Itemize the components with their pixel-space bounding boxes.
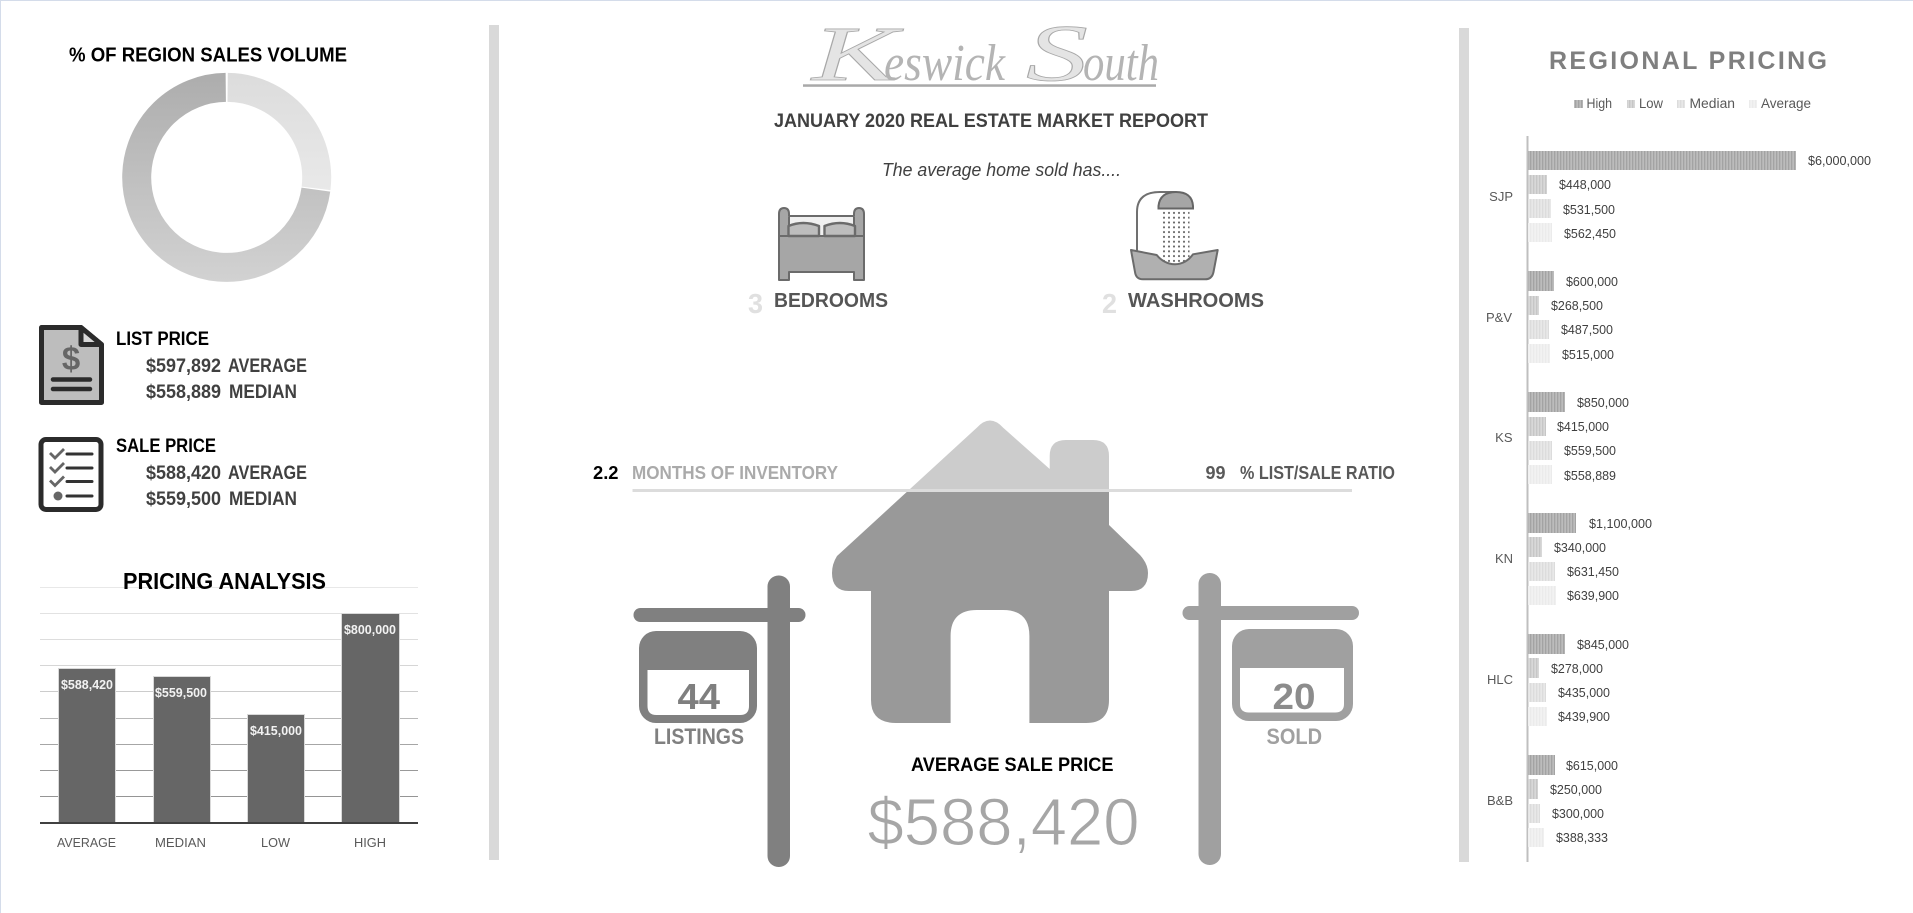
icon: house	[832, 420, 1148, 723]
group: P&V: $268,500	[1551, 299, 1603, 313]
group: SJP	[1489, 151, 1871, 242]
bar values: $588,420	[61, 678, 113, 692]
title: Keswick South: S	[1026, 10, 1088, 98]
group: KS: $559,500	[1564, 444, 1616, 458]
stat: bedrooms: 3	[748, 288, 763, 319]
bar values	[61, 623, 396, 738]
group: SJP: SJP	[1489, 189, 1513, 204]
sign: sold: 20	[1272, 676, 1316, 717]
group: P&V: P&V	[1486, 310, 1512, 325]
group: P&V: $600,000	[1566, 275, 1618, 289]
panel: left column	[40, 44, 418, 850]
bar chart: pricing analysis	[40, 568, 418, 850]
category labels	[57, 835, 386, 850]
legend: High	[1586, 96, 1612, 111]
legend: Median	[1690, 96, 1735, 111]
bars	[58, 614, 400, 822]
list price block	[116, 328, 307, 403]
list price block: AVERAGE	[228, 356, 307, 377]
stat line: inventory and ratio	[593, 463, 1395, 492]
heading: regional pricing: REGIONAL PRICING	[1549, 47, 1827, 75]
group: B&B: $300,000	[1552, 807, 1604, 821]
bar values: $415,000	[250, 724, 302, 738]
group: B&B	[1487, 755, 1618, 847]
sale price block: MEDIAN	[229, 489, 297, 510]
group: KN: KN	[1495, 551, 1513, 566]
sign: listings: 44	[678, 676, 720, 717]
legend: Low	[1639, 96, 1663, 111]
group: KN: $639,900	[1567, 589, 1619, 603]
icon: price document	[42, 328, 102, 402]
icon: checklist	[41, 440, 101, 510]
group: B&B: $615,000	[1566, 759, 1618, 773]
group: P&V: $487,500	[1561, 323, 1613, 337]
average sale price: $588,420	[868, 785, 1140, 860]
sale price block	[116, 435, 307, 510]
title: Keswick South	[810, 10, 1159, 98]
category labels: MEDIAN	[155, 835, 206, 850]
donut chart	[137, 87, 317, 267]
group: HLC: $439,900	[1558, 710, 1610, 724]
list price block: LIST PRICE	[116, 328, 209, 350]
stat: washrooms: 2	[1102, 288, 1117, 319]
heading: % of region sales volume: % OF REGION SALES VOLUME	[69, 44, 347, 66]
icon: bed	[779, 208, 864, 280]
bar values: $559,500	[155, 686, 207, 700]
group: KN: $631,450	[1567, 565, 1619, 579]
group: SJP: $6,000,000	[1808, 154, 1871, 168]
icon: shower and tub	[1131, 192, 1218, 279]
group: KS: KS	[1495, 430, 1513, 445]
bar values: $800,000	[344, 623, 396, 637]
group: SJP: $531,500	[1563, 203, 1615, 217]
group: HLC: $278,000	[1551, 662, 1603, 676]
list price block: $558,889	[146, 382, 221, 403]
category labels: AVERAGE	[57, 835, 116, 850]
group: KN	[1495, 513, 1652, 605]
sign: listings: LISTINGS	[654, 724, 744, 749]
stat line: inventory and ratio: 99	[1206, 463, 1226, 483]
sale price block: $559,500	[146, 489, 221, 510]
title: Keswick South: eswick	[884, 35, 1006, 92]
group: B&B: $250,000	[1550, 783, 1602, 797]
title: Keswick South: K	[810, 10, 905, 97]
stat: bedrooms: BEDROOMS	[774, 290, 888, 312]
list price block: MEDIAN	[229, 382, 297, 403]
category labels: HIGH	[354, 835, 386, 850]
average sale price: AVERAGE SALE PRICE	[911, 755, 1114, 776]
group: B&B: B&B	[1487, 793, 1513, 808]
group: P&V: $515,000	[1562, 348, 1614, 362]
group: KS	[1495, 392, 1629, 484]
group: KN: $340,000	[1554, 541, 1606, 555]
group: KN: $1,100,000	[1589, 517, 1652, 531]
title: Keswick South: outh	[1083, 35, 1159, 92]
icon: price document: $	[62, 340, 80, 377]
legend	[1574, 96, 1811, 111]
divider: left column	[489, 25, 499, 860]
chart title: PRICING ANALYSIS	[123, 568, 326, 594]
group: HLC: $845,000	[1577, 638, 1629, 652]
sale price block: AVERAGE	[228, 463, 307, 484]
group: SJP: $562,450	[1564, 227, 1616, 241]
sign: sold	[1182, 573, 1359, 865]
stat line: inventory and ratio: % LIST/SALE RATIO	[1240, 463, 1395, 483]
group: HLC: $435,000	[1558, 686, 1610, 700]
list price block: $597,892	[146, 356, 221, 377]
legend: Average	[1761, 96, 1811, 111]
sign: sold: SOLD	[1266, 724, 1322, 749]
category labels: LOW	[261, 835, 291, 850]
intro line: The average home sold has....	[882, 160, 1121, 180]
stat line: inventory and ratio: MONTHS OF INVENTORY	[632, 463, 838, 483]
stat: washrooms	[1102, 288, 1264, 319]
stat: washrooms: WASHROOMS	[1128, 290, 1264, 312]
group: SJP: $448,000	[1559, 178, 1611, 192]
group: KS: $558,889	[1564, 469, 1616, 483]
group: KS: $850,000	[1577, 396, 1629, 410]
panel: centre column	[593, 10, 1395, 867]
sign: listings	[634, 576, 806, 867]
group: P&V	[1486, 271, 1618, 363]
axis	[1526, 136, 1528, 862]
sale price block: $588,420	[146, 463, 221, 484]
stat line: inventory and ratio: 2.2	[593, 463, 618, 483]
panel: regional pricing	[1486, 47, 1871, 862]
group: KS: $415,000	[1557, 420, 1609, 434]
sale price block: SALE PRICE	[116, 435, 216, 457]
divider: right column	[1459, 28, 1469, 862]
group: HLC: HLC	[1487, 672, 1513, 687]
group: B&B: $388,333	[1556, 831, 1608, 845]
subtitle: JANUARY 2020 REAL ESTATE MARKET REPOORT	[774, 110, 1208, 132]
stat: bedrooms	[748, 288, 888, 319]
group: HLC	[1487, 634, 1629, 726]
